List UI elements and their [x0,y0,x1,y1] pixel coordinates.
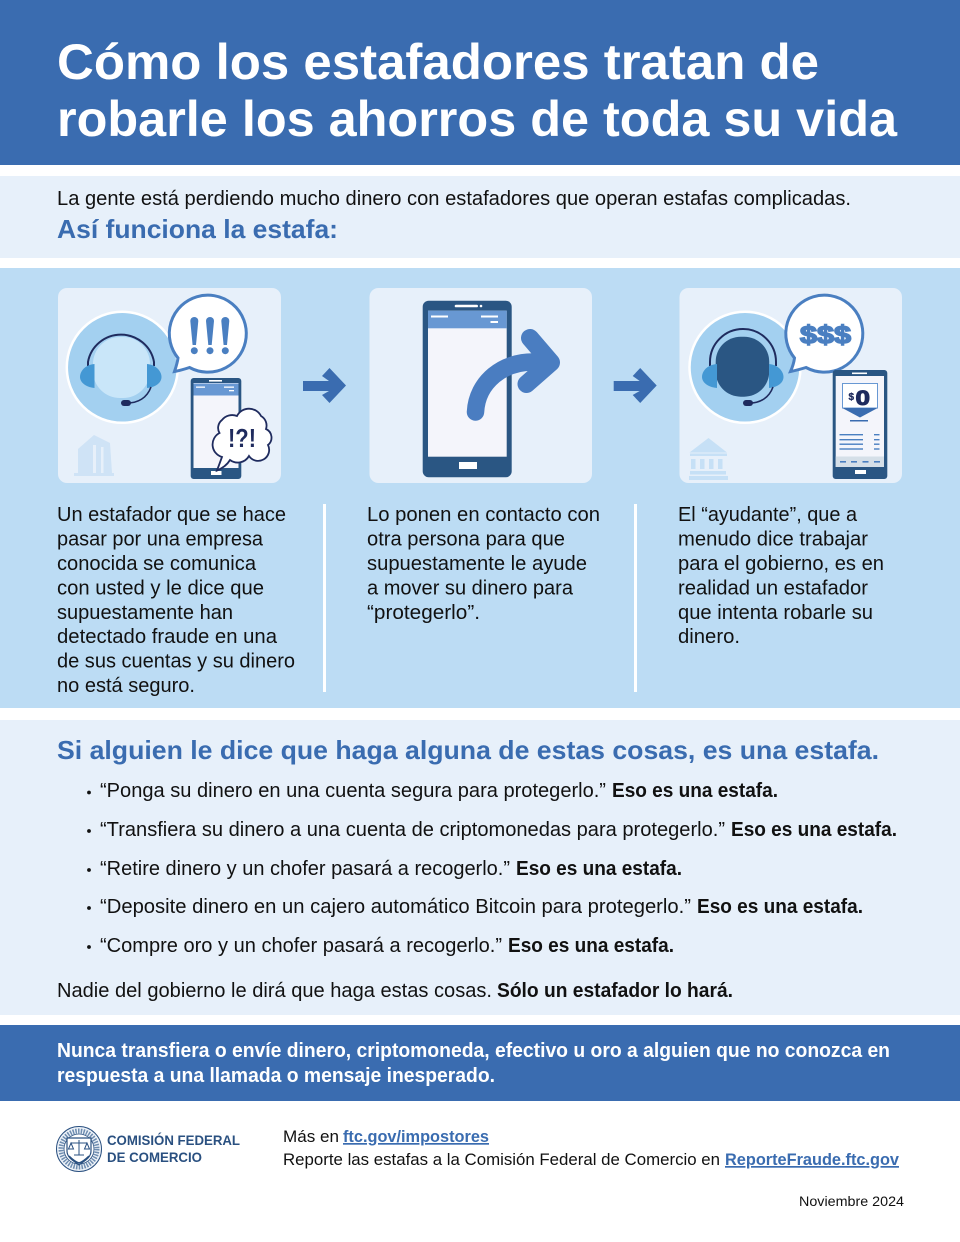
footer agency name: COMISIÓN FEDERAL [107,1131,240,1148]
step 1 text: de sus cuentas y su dinero [57,651,295,673]
step 2 text: a mover su dinero para [367,577,574,599]
footer agency name: DE COMERCIO [107,1149,202,1165]
icon: faint office building [74,435,114,476]
footer links: Reporte las estafas a la Comisión Federal de Comercio en [283,1150,720,1169]
bullet list: “Retire dinero y un chofer pasará a recogerlo.” [100,858,510,880]
footer logo: FTC seal [56,1126,102,1172]
icon: faint bank building [689,438,728,480]
intro text: La gente está perdiendo mucho dinero con estafadores que operan estafas complicadas. [57,188,851,210]
step 1 text: pasar por una empresa [57,528,264,550]
title [57,34,898,147]
icon: speech bubble with exclamation marks [169,295,246,372]
publication date: Noviembre 2024 [799,1193,904,1209]
step 1 text: no está seguro. [57,675,195,697]
footer links: Más en [283,1127,339,1146]
step 2 text: Lo ponen en contacto con [367,504,600,526]
step 1 text [57,504,295,697]
arrow: step 2 to step 3 [614,368,657,403]
step 3 text: que intenta robarle su [678,602,873,624]
footer links: ftc.gov/impostores [343,1127,489,1146]
icon: helper with dark head and headset [690,312,800,423]
step 1 text: conocida se comunica [57,553,257,575]
bullet list: “Compre oro y un chofer pasará a recogerlo.” [100,935,502,957]
step 3 text: menudo dice trabajar [678,528,868,550]
step 2 text: supuestamente le ayude [367,553,587,575]
bullet list [87,780,897,957]
step 3 text [678,504,884,648]
closing statement: Sólo un estafador lo hará. [497,980,733,1002]
icon: scammer with headset [67,312,178,423]
step 3 illustration [680,288,902,483]
step 3 text: para el gobierno, es en [678,553,884,575]
step 1 text: con usted y le dice que [57,577,264,599]
icon: phone [423,301,512,477]
callout banner: respuesta a una llamada o mensaje inesperado. [57,1065,495,1087]
step 3 text: realidad un estafador [678,577,868,599]
bullet list: Eso es una estafa. [516,858,682,880]
bullet list: “Deposite dinero en un cajero automático Bitcoin para protegerlo.” [100,896,691,918]
icon: phone showing zero balance [833,370,887,479]
icon: speech bubble with dollar signs: $$$ [800,321,851,349]
icon: phone showing zero balance: 0 [856,387,870,410]
step 3 text: dinero. [678,626,740,648]
step 1 text: Un estafador que se hace [57,504,286,526]
footer links: ReporteFraude.ftc.gov [725,1150,900,1169]
heading: if someone tells you: Si alguien le dice que haga alguna de estas cosas, es una estafa. [57,735,879,765]
closing statement [57,980,733,1002]
step 3 text: El “ayudante”, que a [678,504,858,526]
step 1 text: detectado fraude en una [57,626,278,648]
bullet list: Eso es una estafa. [612,780,778,802]
step 2 text [367,504,600,624]
step 2 illustration [370,288,592,483]
step 2 text: otra persona para que [367,528,565,550]
icon: phone with confused cloud [191,378,272,479]
intro panel [0,176,960,258]
bullet list: Eso es una estafa. [508,935,674,957]
step 2 text: “protegerlo”. [367,602,480,624]
arrow: step 1 to step 2 [303,368,346,403]
footer links [283,1127,900,1169]
icon: phone with confused cloud: !?! [228,423,256,453]
bullet list: “Transfiera su dinero a una cuenta de criptomonedas para protegerlo.” [100,819,725,841]
panel: warning phrases [0,720,960,1015]
icon: phone showing zero balance: $ [848,392,854,403]
header band [0,0,960,165]
step 1 illustration [58,288,281,483]
footer agency name [107,1131,240,1165]
title: Cómo los estafadores tratan de [57,34,819,90]
heading: how the scam works: Así funciona la estafa: [57,214,338,244]
closing statement: Nadie del gobierno le dirá que haga estas cosas. [57,980,492,1002]
step 1 text: supuestamente han [57,602,233,624]
bullet list: Eso es una estafa. [731,819,897,841]
callout banner: Nunca transfiera o envíe dinero, criptomoneda, efectivo u oro a alguien que no conozca en [57,1040,890,1062]
callout banner [0,1025,960,1101]
title: robarle los ahorros de toda su vida [57,91,898,147]
icon: speech bubble with dollar signs [786,295,863,372]
bullet list: Eso es una estafa. [697,896,863,918]
icon: curved forward arrow [476,338,551,412]
bullet list: “Ponga su dinero en una cuenta segura para protegerlo.” [100,780,606,802]
panel: three steps [0,268,960,708]
